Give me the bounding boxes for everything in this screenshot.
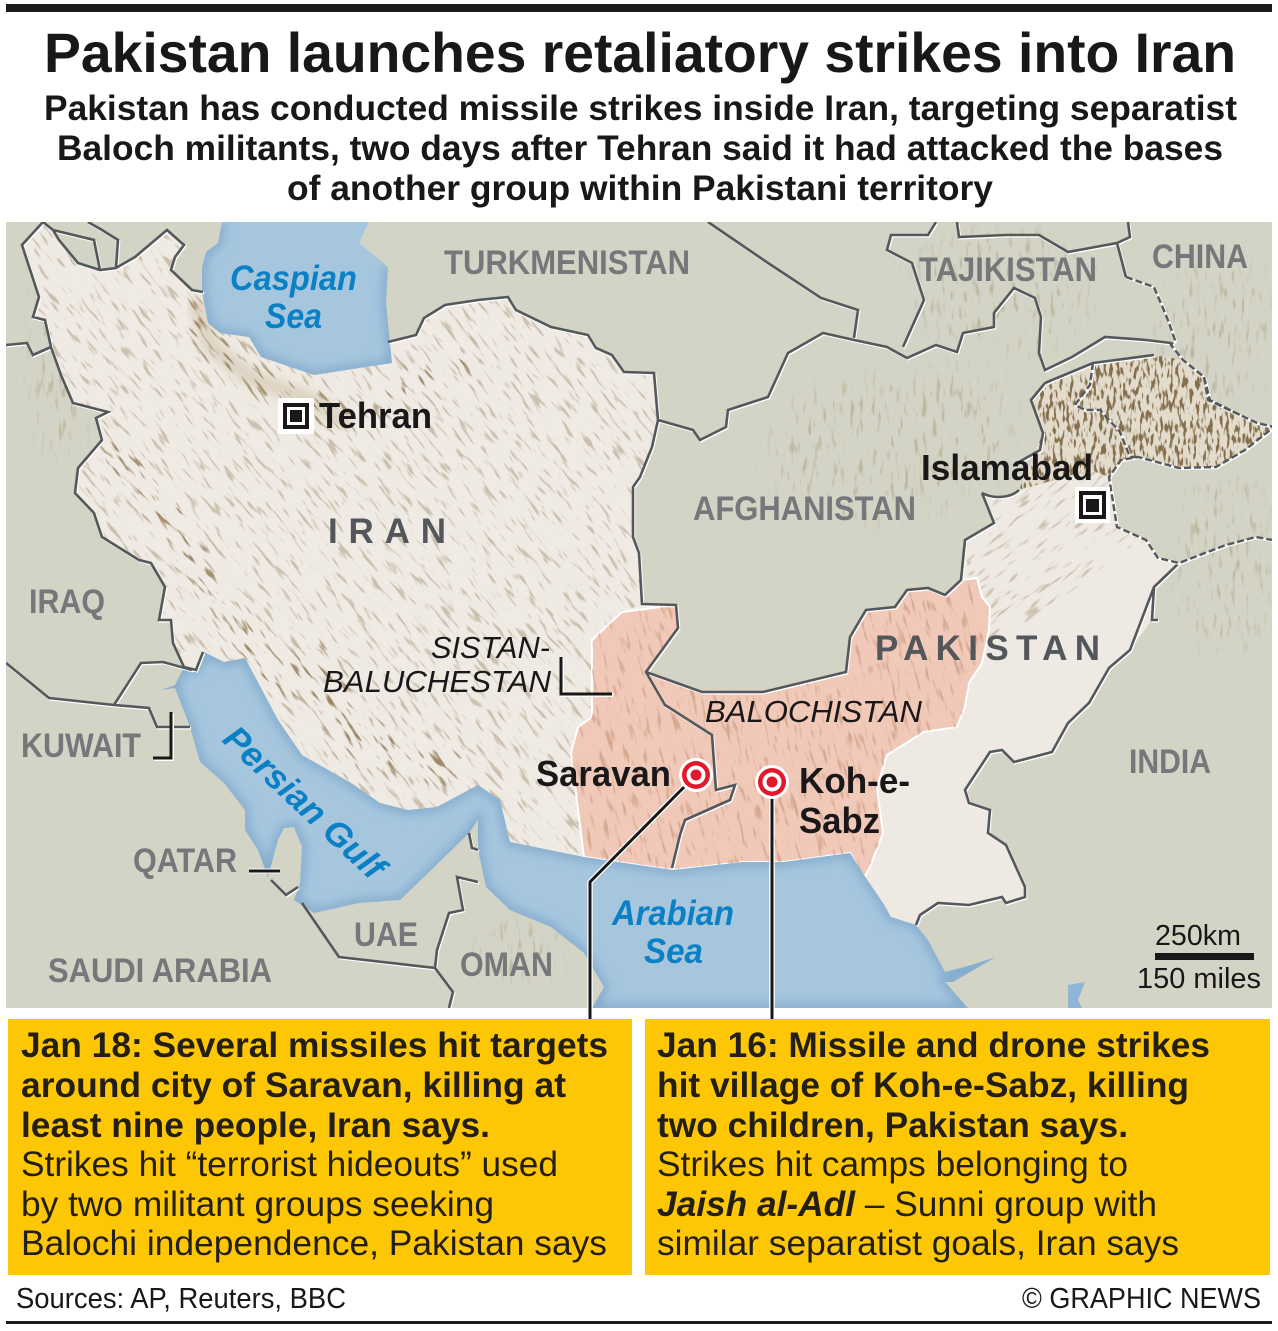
panel: Jan 18 strikes: Balochi independence, Pakistan says (21, 1224, 607, 1263)
country labels: QATAR (133, 842, 237, 880)
subtitle: Pakistan has conducted missile strikes inside Iran, targeting separatist (44, 89, 1237, 128)
panel: Jan 16 strikes: Jaish al-Adl – Sunni group with (657, 1185, 1157, 1224)
sea labels: Sea (265, 297, 322, 336)
land: Iran (24, 226, 657, 856)
panel: Jan 16 strikes: similar separatist goals, Iran says (657, 1224, 1179, 1263)
target: Saravan (537, 758, 713, 792)
sea labels: Arabian (611, 894, 734, 933)
subtitle: of another group within Pakistani territory (287, 169, 994, 208)
leader brackets (153, 657, 613, 871)
panel: Jan 16 strikes: Jan 16: Missile and drone strikes (657, 1026, 1210, 1065)
title: Pakistan launches retaliatory strikes into Iran (44, 21, 1236, 84)
sea: Caspian (202, 222, 392, 375)
region labels: SISTAN- (431, 630, 550, 665)
region: Sistan-Baluchestan and Balochistan (571, 578, 990, 878)
subtitle: Baloch militants, two days after Tehran said it had attacked the bases (57, 129, 1223, 168)
panel: Jan 16 strikes: Strikes hit camps belonging to (657, 1145, 1128, 1184)
panel: Jan 18 strikes: least nine people, Iran says. (21, 1106, 490, 1145)
terrain: mountain ridges of Iran (28, 226, 656, 854)
credit: © GRAPHIC NEWS (1022, 1283, 1261, 1315)
country labels: PAKISTAN (875, 629, 1100, 668)
target: Koh-e-Sabz: Koh-e- (799, 760, 910, 801)
terrain: neighbouring highlands (6, 222, 1272, 1008)
target: Koh-e-Sabz: Sabz (799, 800, 880, 841)
panel: Jan 18 strikes: Strikes hit “terrorist hideouts” used (21, 1145, 558, 1184)
panel: Jan 18 strikes (8, 1019, 632, 1275)
land: Kashmir highlands (1019, 355, 1274, 490)
panel: Jan 16 strikes: two children, Pakistan says. (657, 1106, 1128, 1145)
country labels: KUWAIT (21, 727, 141, 765)
leader stubs to panels (588, 1008, 774, 1020)
panel: Jan 16 strikes: hit village of Koh-e-Sabz, killing (657, 1066, 1189, 1105)
city: Islamabad (921, 447, 1110, 523)
terrain: northern Pakistan tint (967, 470, 1144, 639)
strike line: Saravan (590, 778, 693, 1010)
country labels: IRAN (328, 512, 446, 551)
terrain: ridges of Balochistan (572, 580, 984, 870)
sea labels: Caspian (230, 259, 357, 298)
region labels: BALUCHESTAN (323, 664, 552, 699)
country labels: INDIA (1129, 743, 1211, 781)
sea labels: Persian Gulf (216, 718, 395, 890)
scale bar (1139, 924, 1260, 988)
region labels: BALOCHISTAN (705, 694, 923, 729)
region labels (324, 636, 922, 722)
national borders (6, 222, 1275, 1009)
terrain: Kashmir ridges (1020, 356, 1269, 490)
city: Islamabad: Islamabad (921, 447, 1093, 488)
country labels: CHINA (1152, 238, 1248, 276)
country labels: AFGHANISTAN (693, 490, 916, 528)
target: Saravan: Saravan (536, 753, 671, 794)
city: Tehran (278, 398, 430, 434)
scale bar: 250km (1155, 920, 1241, 952)
country labels: TURKMENISTAN (444, 244, 690, 282)
sea labels (216, 259, 734, 971)
sea: Persian Gulf and Arabian Sea (161, 652, 1085, 1008)
country labels: SAUDI ARABIA (48, 952, 272, 990)
panel: Jan 16 strikes (645, 1019, 1270, 1275)
country labels (21, 238, 1248, 990)
scale bar: 150 miles (1137, 963, 1261, 995)
subtitle (44, 89, 1237, 208)
country labels: IRAQ (29, 583, 105, 621)
strike line: Koh-e-Sabz (769, 790, 775, 1010)
target: Koh-e-Sabz (755, 765, 909, 834)
city: Tehran: Tehran (319, 395, 432, 436)
country labels: TAJIKISTAN (919, 251, 1097, 289)
land: Pakistan (866, 470, 1176, 924)
panel: map (6, 222, 1272, 1008)
panel: Jan 18 strikes: Jan 18: Several missiles hit targets (21, 1026, 608, 1065)
country labels: UAE (354, 916, 418, 954)
country labels: OMAN (460, 946, 553, 984)
panel: Jan 18 strikes: around city of Saravan, killing at (21, 1066, 566, 1105)
sources: Sources: AP, Reuters, BBC (16, 1283, 346, 1315)
bottom rule (6, 1321, 1272, 1324)
sea labels: Sea (644, 932, 703, 971)
top rule (6, 4, 1272, 12)
panel: Jan 18 strikes: by two militant groups seeking (21, 1185, 494, 1224)
